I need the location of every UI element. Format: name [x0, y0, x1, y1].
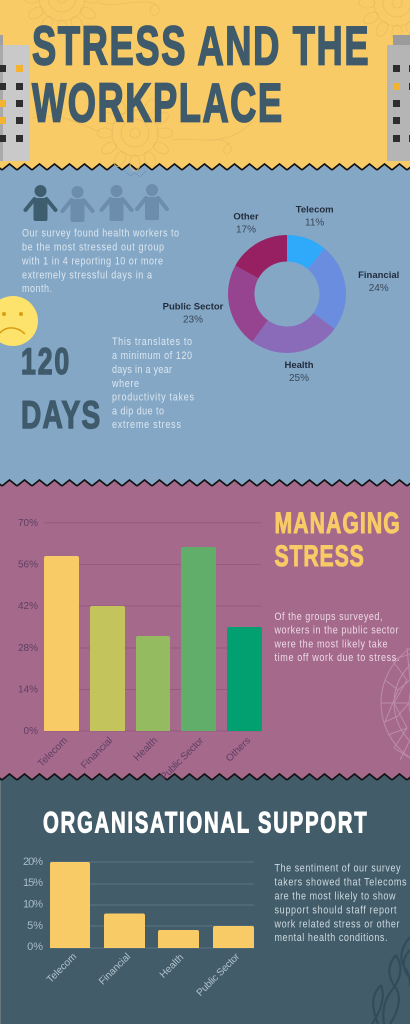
text: productivity explanation: This translates to [112, 336, 192, 348]
y axis labels [18, 518, 38, 737]
bar chart: time off work [18, 518, 262, 783]
stat: 120 days: DAYS [21, 394, 100, 437]
x axis labels: Health [158, 952, 186, 981]
donut chart [163, 205, 399, 384]
text: health workers finding [21, 228, 179, 295]
divider: survey zigzag [0, 479, 410, 487]
heading: managing stress: MANAGING [274, 508, 400, 540]
x axis labels: Telecom [45, 951, 79, 985]
y axis labels: 70% [18, 518, 38, 529]
text: health workers finding: extremely stressful days in a [22, 270, 152, 282]
icon: right building [387, 35, 410, 161]
y axis labels: 15% [23, 877, 43, 889]
x axis labels: Financial [97, 951, 133, 987]
text: health workers finding: with 1 in 4 reporting 10 or more [21, 256, 163, 268]
text: telecoms sentiment: takers showed that Telecoms [274, 877, 407, 889]
y axis labels: 0% [24, 726, 38, 737]
text: productivity explanation: a minimum of 120 [112, 350, 192, 362]
y axis labels: 42% [18, 601, 38, 612]
text: telecoms sentiment [274, 863, 407, 944]
decorative sunflowers [24, 0, 410, 171]
panel: survey results [0, 171, 410, 479]
icon: sad face [0, 296, 38, 346]
stat: 120 days [21, 341, 100, 437]
icon: left building [0, 35, 30, 161]
title: WORKPLACE [32, 72, 282, 133]
donut labels: Telecom [296, 205, 334, 216]
x axis labels: Health [132, 735, 160, 764]
decorative vine [372, 937, 410, 1024]
text: public sector finding [274, 611, 399, 664]
text: health workers finding: month. [22, 283, 52, 295]
x axis labels [36, 735, 253, 783]
donut labels: Financial [358, 270, 399, 281]
x axis labels: Others [224, 735, 253, 764]
bars [44, 547, 262, 731]
y axis labels: 10% [23, 898, 43, 910]
text: health workers finding: be the most stressed out group [22, 242, 164, 254]
heading: organisational support: ORGANISATIONAL SUPPORT [43, 807, 367, 840]
text: telecoms sentiment: are the most likely to show [274, 891, 396, 903]
text: public sector finding: workers in the public sector [274, 625, 399, 637]
x axis labels: Public Sector [195, 951, 243, 999]
y axis labels: 5% [27, 920, 43, 932]
divider: managing stress zigzag [0, 773, 410, 781]
text: telecoms sentiment: mental health conditions. [274, 932, 387, 944]
panel: header [0, 0, 410, 171]
panel: organisational support [0, 781, 410, 1024]
text: telecoms sentiment: support should staff report [274, 905, 397, 917]
title [32, 15, 369, 133]
donut labels: 11% [305, 218, 324, 229]
x axis labels: Financial [79, 735, 115, 771]
heading: managing stress [274, 508, 400, 573]
text: productivity explanation: a dip due to [112, 406, 164, 418]
donut labels: 17% [236, 224, 256, 235]
text: telecoms sentiment: work related stress or other [274, 919, 400, 931]
donut labels: 24% [369, 283, 389, 294]
donut labels [163, 205, 399, 384]
x axis labels: Public Sector [159, 735, 207, 783]
bar chart: organisational support [23, 856, 254, 999]
gridlines [44, 523, 261, 731]
text: productivity explanation: extreme stress [112, 419, 181, 431]
donut labels: Public Sector [163, 302, 224, 313]
donut labels: 23% [183, 315, 203, 326]
y axis labels: 56% [18, 560, 38, 570]
donut labels: Health [284, 360, 314, 371]
text: health workers finding: Our survey found health workers to [22, 228, 179, 240]
text: public sector finding: time off work due to stress. [274, 652, 399, 664]
gridlines [50, 862, 254, 948]
x axis labels [45, 951, 243, 999]
text: public sector finding: Of the groups surveyed, [274, 611, 382, 623]
y axis labels: 0% [27, 941, 43, 953]
text: public sector finding: were the most likely take [274, 639, 388, 651]
bars [50, 862, 254, 948]
text: productivity explanation: where [111, 378, 139, 390]
y axis labels [23, 856, 43, 953]
text: productivity explanation: days in a year [112, 364, 173, 376]
text: productivity explanation: productivity takes [112, 392, 194, 404]
title: STRESS AND THE [32, 15, 369, 76]
heading: managing stress: STRESS [274, 541, 364, 573]
y axis labels: 14% [18, 684, 38, 696]
icon: group of four people [26, 184, 167, 222]
donut labels: 25% [289, 373, 309, 384]
panel: managing stress [0, 487, 410, 783]
divider: header zigzag [0, 163, 410, 171]
stat: 120 days: 120 [21, 341, 69, 382]
text: productivity explanation [111, 336, 194, 431]
y axis labels: 20% [23, 856, 43, 868]
donut labels: Other [233, 211, 259, 222]
decorative mandala [381, 637, 410, 769]
y axis labels: 28% [18, 643, 38, 654]
text: telecoms sentiment: The sentiment of our survey [274, 863, 401, 875]
x axis labels: Telecom [36, 735, 70, 769]
